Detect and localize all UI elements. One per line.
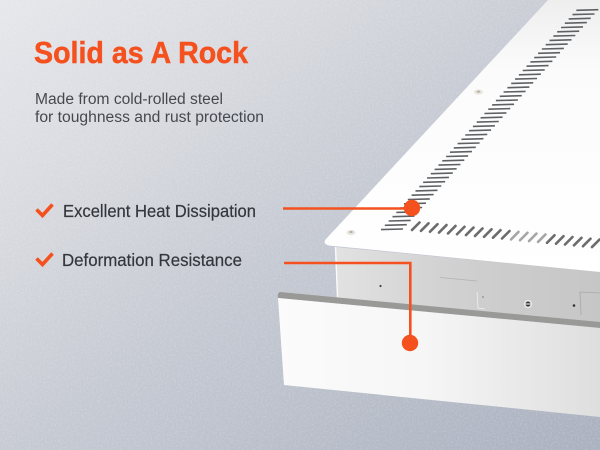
side wall screw bbox=[524, 300, 532, 308]
title: Solid as A Rock bbox=[34, 35, 249, 70]
callout: leader to front cover bbox=[284, 263, 418, 351]
icon: check mark bbox=[36, 254, 52, 264]
front cover panel bbox=[278, 298, 600, 417]
side wall of enclosure bbox=[335, 247, 600, 324]
label: excellent heat dissipation: Excellent Heat Dissipation bbox=[63, 201, 256, 221]
icon: check mark bbox=[36, 204, 52, 216]
front cover flange bbox=[278, 292, 600, 328]
feature: excellent heat dissipation bbox=[36, 201, 256, 221]
subtitle text block bbox=[35, 91, 264, 126]
screws on top plate bbox=[346, 89, 483, 235]
subtitle text block: for toughness and rust protection bbox=[35, 109, 264, 126]
feature: deformation resistance bbox=[36, 250, 242, 270]
top plate bbox=[325, 0, 600, 272]
diagonal vent slots bbox=[381, 10, 598, 230]
product: steel enclosure bbox=[278, 0, 600, 417]
callout: leader to vent slots bbox=[283, 200, 420, 216]
front edge vent slots bbox=[412, 222, 600, 247]
subtitle text block: Made from cold-rolled steel bbox=[35, 91, 223, 108]
label: deformation resistance: Deformation Resistance bbox=[62, 250, 242, 270]
